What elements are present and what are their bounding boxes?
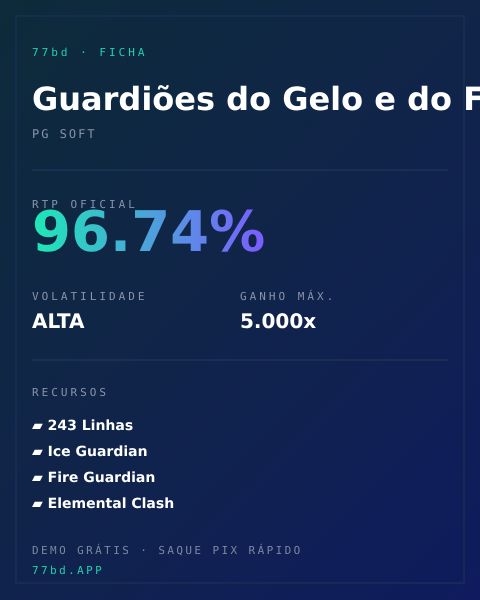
footer note: DEMO GRÁTIS · SAQUE PIX RÁPIDO: [32, 544, 303, 557]
max win label: GANHO MÁX.: [240, 290, 336, 303]
eyebrow label: 77bd · FICHA: [32, 46, 147, 59]
feature item: ▰ Fire Guardian: [32, 470, 155, 486]
features label: RECURSOS: [32, 386, 109, 399]
provider: PG SOFT: [32, 127, 97, 141]
RTP label: RTP OFICIAL: [32, 198, 138, 211]
feature item: ▰ Elemental Clash: [32, 496, 174, 512]
divider: [32, 359, 448, 361]
footer link: 77bd.APP: [32, 564, 104, 577]
stat: volatility: [32, 290, 147, 333]
feature item: ▰ 243 Linhas: [32, 418, 133, 434]
volatility label: VOLATILIDADE: [32, 290, 147, 303]
stat: max win: [240, 290, 336, 333]
max win value: 5.000x: [240, 309, 316, 333]
feature item: ▰ Ice Guardian: [32, 444, 148, 460]
divider: [32, 169, 448, 171]
RTP value: 96.74%: [32, 200, 265, 265]
volatility value: ALTA: [32, 309, 84, 333]
features list: [32, 418, 174, 512]
